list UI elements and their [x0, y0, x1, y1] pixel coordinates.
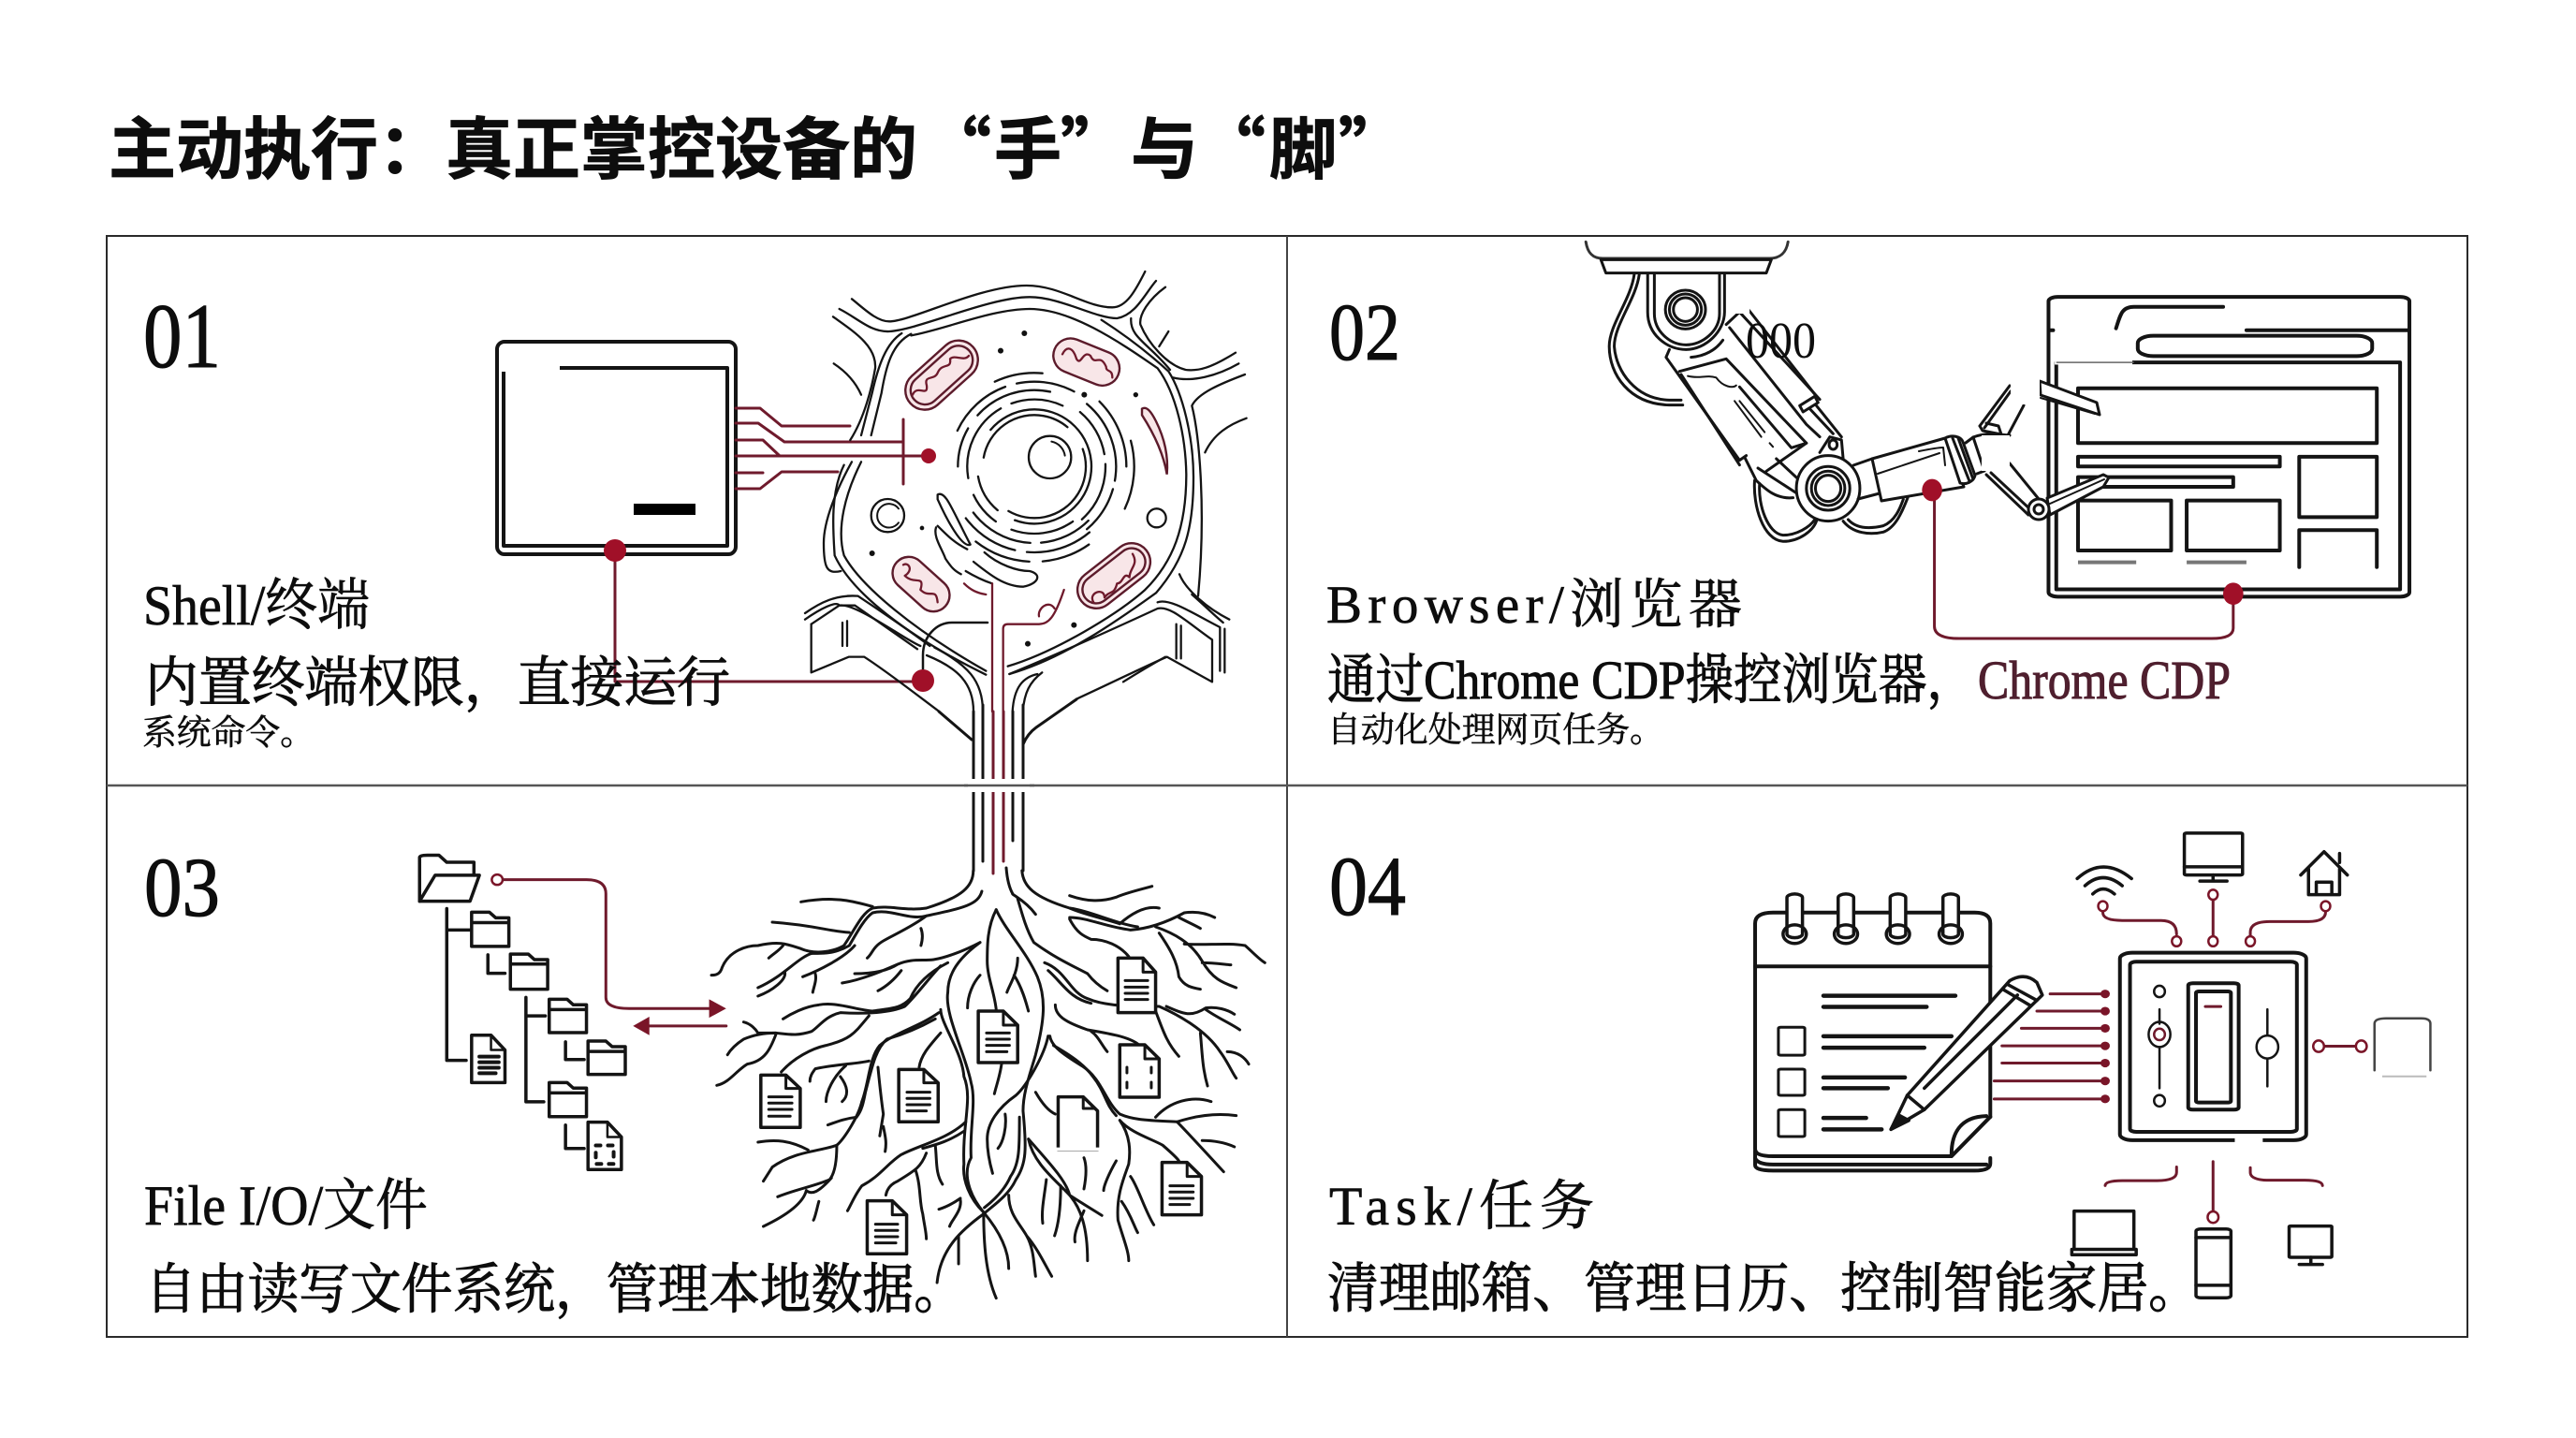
root folder [419, 856, 479, 902]
red arrows from notebook to device [1994, 990, 2110, 1103]
title: 手 [994, 95, 1061, 193]
icon: roots [711, 871, 1265, 1299]
cell walls [805, 271, 1247, 712]
left roots [717, 900, 980, 1239]
icon: robot gripper and forearm [1853, 374, 2109, 520]
label: number 04: 04 [1329, 841, 1406, 933]
highlighted Chrome CDP: Chrome CDP [1978, 650, 2231, 711]
binder rings [1783, 894, 1962, 944]
top monitor [2185, 833, 2243, 881]
desktop [2290, 1226, 2332, 1265]
title: ” [1339, 95, 1406, 193]
icon: notebook and pencil [1755, 894, 2042, 1170]
red stem conduits inside cell [992, 583, 1064, 712]
red connector from terminal to cell [604, 539, 988, 692]
circuit traces from terminal to cell [736, 408, 936, 489]
icon: terminal window [497, 342, 736, 554]
tree connectors [446, 908, 584, 1149]
panel: 02 browser [1326, 242, 2409, 750]
root flares [711, 871, 1120, 976]
mitochondria [886, 332, 1167, 618]
description line 1: 通过Chrome CDP操控浏览器， [1327, 650, 1975, 711]
label: browser heading: Browser/浏览器 [1326, 576, 1742, 635]
grid frame [107, 236, 2467, 1337]
panel: 03 file io [144, 842, 1265, 1320]
icon: cell [805, 271, 1247, 712]
checklist [1778, 996, 1955, 1137]
laptop [2071, 1211, 2136, 1255]
title: “ [924, 95, 991, 193]
read/write arrows [491, 874, 726, 1035]
icons: connected devices [2071, 833, 2430, 1298]
label: task heading: Task/任务 [1329, 1176, 1594, 1237]
phone [2196, 1229, 2231, 1298]
description line 1: 内置终端权限，直接运行 [145, 653, 730, 713]
central roots [937, 910, 1052, 1299]
bottom connectors [2105, 1162, 2322, 1223]
red connector from arm to browser [1922, 479, 2244, 638]
description line 2: 自动化处理网页任务。 [1327, 711, 1663, 750]
label: number 01: 01 [143, 286, 221, 388]
sub folders [472, 912, 625, 1117]
stray label 000: 000 [1746, 312, 1816, 369]
nucleus and endoplasmic reticulum [870, 330, 1167, 647]
wifi [2077, 867, 2131, 894]
label: file io heading: File I/O/文件 [144, 1175, 428, 1237]
label: shell heading: Shell/终端 [143, 575, 370, 637]
right roots [1017, 887, 1265, 1261]
description line 2: 系统命令。 [142, 713, 315, 753]
title: 与 [1131, 95, 1198, 193]
tree documents [472, 1035, 622, 1169]
icon: browser window [2048, 297, 2409, 596]
icon: robot arm [1586, 242, 1909, 541]
label: number 03: 03 [144, 842, 220, 934]
documents among roots [761, 958, 1202, 1254]
panel: 01 shell [142, 271, 1247, 894]
icon: control device [2120, 953, 2306, 1158]
icon: folder tree [419, 856, 726, 1169]
panel: 04 task [1327, 833, 2430, 1319]
pencil [1891, 976, 2042, 1129]
description: 清理邮箱、管理日历、控制智能家居。 [1327, 1258, 2200, 1319]
title: 脚 [1269, 95, 1337, 193]
title: “ [1198, 95, 1266, 193]
house [2301, 852, 2348, 895]
title: 主动执行：真正掌控设备的 [109, 95, 917, 193]
right connector and blank tile [2313, 1019, 2430, 1077]
top connectors [2099, 889, 2330, 946]
notebook body [1755, 913, 1990, 1170]
label: number 02: 02 [1329, 286, 1400, 377]
description: 自由读写文件系统，管理本地数据。 [145, 1259, 965, 1320]
stem linking cell to roots [939, 699, 1076, 894]
title: ” [1061, 95, 1128, 193]
